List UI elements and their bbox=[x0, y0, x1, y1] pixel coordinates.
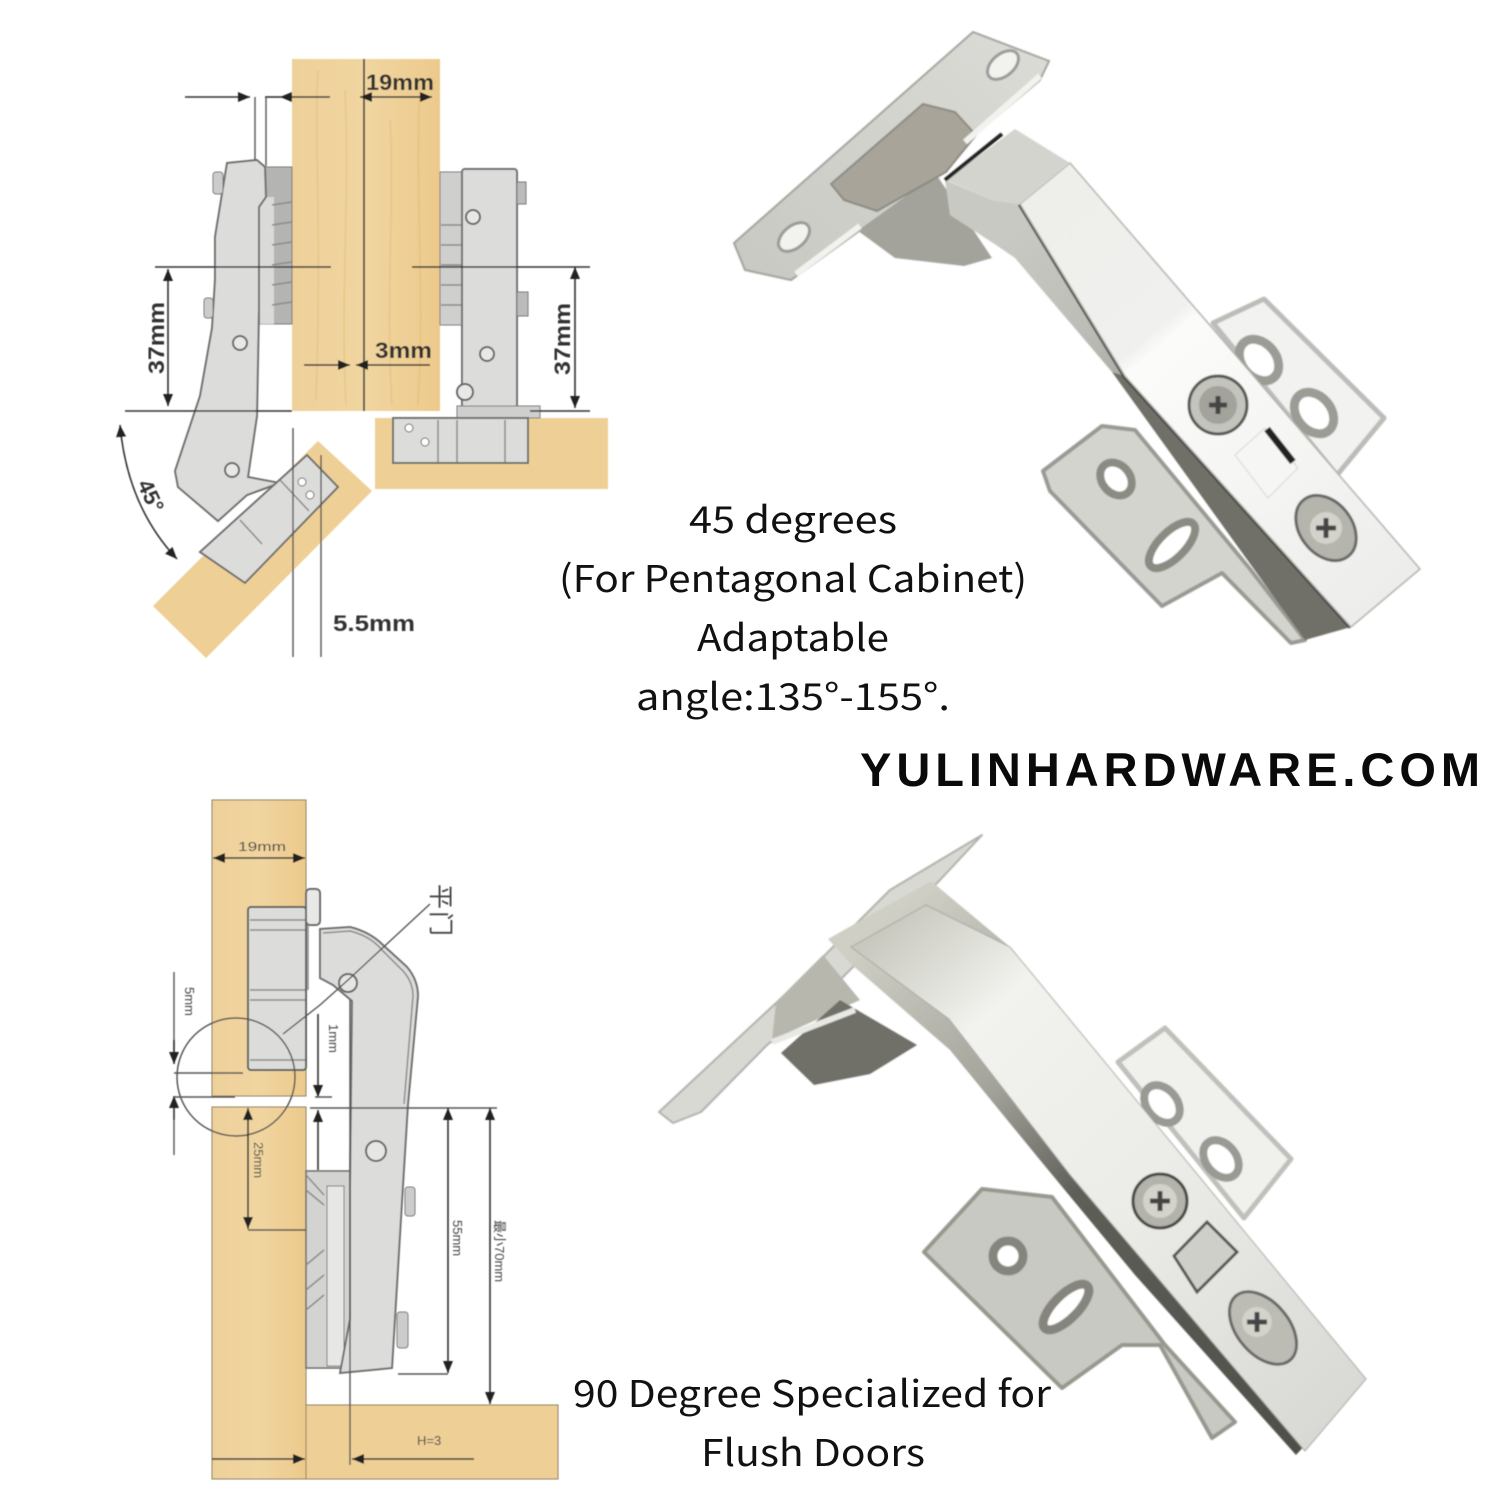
hinge arm side bbox=[828, 881, 1366, 1455]
front mounting plate bbox=[924, 1189, 1235, 1438]
caption: 45 degrees: angle:135°-155°. bbox=[636, 667, 950, 721]
brand: website name: YULINHARDWARE.COM bbox=[860, 743, 1480, 796]
hinge arm bbox=[320, 927, 418, 1373]
dimension label: right 37mm: 37mm bbox=[550, 303, 575, 375]
wood grain bbox=[316, 70, 421, 405]
dimension label: 25mm: 25mm bbox=[251, 1142, 266, 1178]
angled wooden door bbox=[153, 441, 372, 658]
caption: 90 degree flush doors: Flush Doors bbox=[701, 1423, 925, 1477]
wooden side panel bbox=[292, 59, 440, 411]
wooden cabinet base block bbox=[375, 418, 608, 489]
bottom wood board bbox=[306, 1405, 558, 1479]
caption: 45 degrees: 45 degrees bbox=[689, 490, 897, 544]
square slot bbox=[1235, 428, 1298, 498]
hinge arm side bbox=[945, 180, 1351, 640]
caption: 90 degree flush doors: 90 Degree Specialized for bbox=[573, 1364, 1052, 1418]
lower wood panel bbox=[212, 1107, 306, 1479]
right hinge cup bbox=[440, 172, 465, 325]
caption: 90 degree flush doors bbox=[573, 1364, 1052, 1477]
diagram: 90 degree flush door hinge installation bbox=[174, 800, 558, 1479]
dimension label: 1mm: 1mm bbox=[326, 1024, 341, 1053]
thin mounting plate bbox=[659, 835, 982, 1123]
lower screw bbox=[1283, 484, 1369, 572]
lower screw bbox=[1216, 1279, 1310, 1377]
rear mounting plate bbox=[1213, 299, 1384, 475]
product photo: 90 degree hinge bbox=[659, 835, 1366, 1455]
upper screw bbox=[1189, 376, 1247, 434]
lower cup bbox=[306, 1171, 350, 1368]
hinge arm top bbox=[851, 905, 1366, 1451]
product photo: 45 degree hinge bbox=[734, 32, 1420, 643]
dimension label: flush door: 平门 bbox=[426, 884, 454, 936]
right hinge arm bbox=[457, 169, 540, 418]
dimension label: 45 degree angle: 45° bbox=[132, 476, 169, 516]
front mounting plate bbox=[1043, 426, 1305, 643]
diagram: 45 degree hinge installation bbox=[120, 59, 608, 658]
dimension label: H=3: H=3 bbox=[417, 1433, 441, 1448]
dimension label: 19mm: 19mm bbox=[238, 839, 286, 854]
hinge cup bbox=[772, 955, 917, 1085]
dimension label: left 37mm: 37mm bbox=[144, 302, 169, 374]
hinge cup underside bbox=[850, 165, 992, 266]
dimension label: 19mm: 19mm bbox=[366, 70, 434, 95]
cabinet mounting plate bbox=[393, 418, 528, 463]
dimension label: minimum 70mm: 最小70mm bbox=[492, 1220, 507, 1282]
cup mounting plate bbox=[734, 32, 1049, 280]
left hinge arm bbox=[175, 160, 280, 521]
dimension lines bbox=[174, 858, 497, 1465]
angled hinge plate bbox=[200, 455, 338, 583]
square slot bbox=[1174, 1222, 1237, 1292]
dimension label: 5.5mm: 5.5mm bbox=[333, 611, 415, 636]
upper cup bbox=[248, 889, 320, 1070]
caption: 45 degrees: (For Pentagonal Cabinet) bbox=[559, 549, 1027, 603]
upper screw bbox=[1133, 1174, 1187, 1228]
hinge arm top bbox=[945, 129, 1420, 627]
caption: 45 degrees bbox=[559, 490, 1027, 721]
dimension label: 3mm: 3mm bbox=[375, 338, 432, 363]
upper wood panel bbox=[212, 800, 306, 1096]
left hinge cup bbox=[260, 167, 292, 324]
dimension lines bbox=[120, 59, 590, 657]
dimension label: 55mm: 55mm bbox=[450, 1220, 465, 1256]
caption: 45 degrees: Adaptable bbox=[697, 608, 889, 662]
dimension label: 5mm: 5mm bbox=[182, 987, 197, 1016]
rear mounting plate bbox=[1118, 1028, 1291, 1218]
